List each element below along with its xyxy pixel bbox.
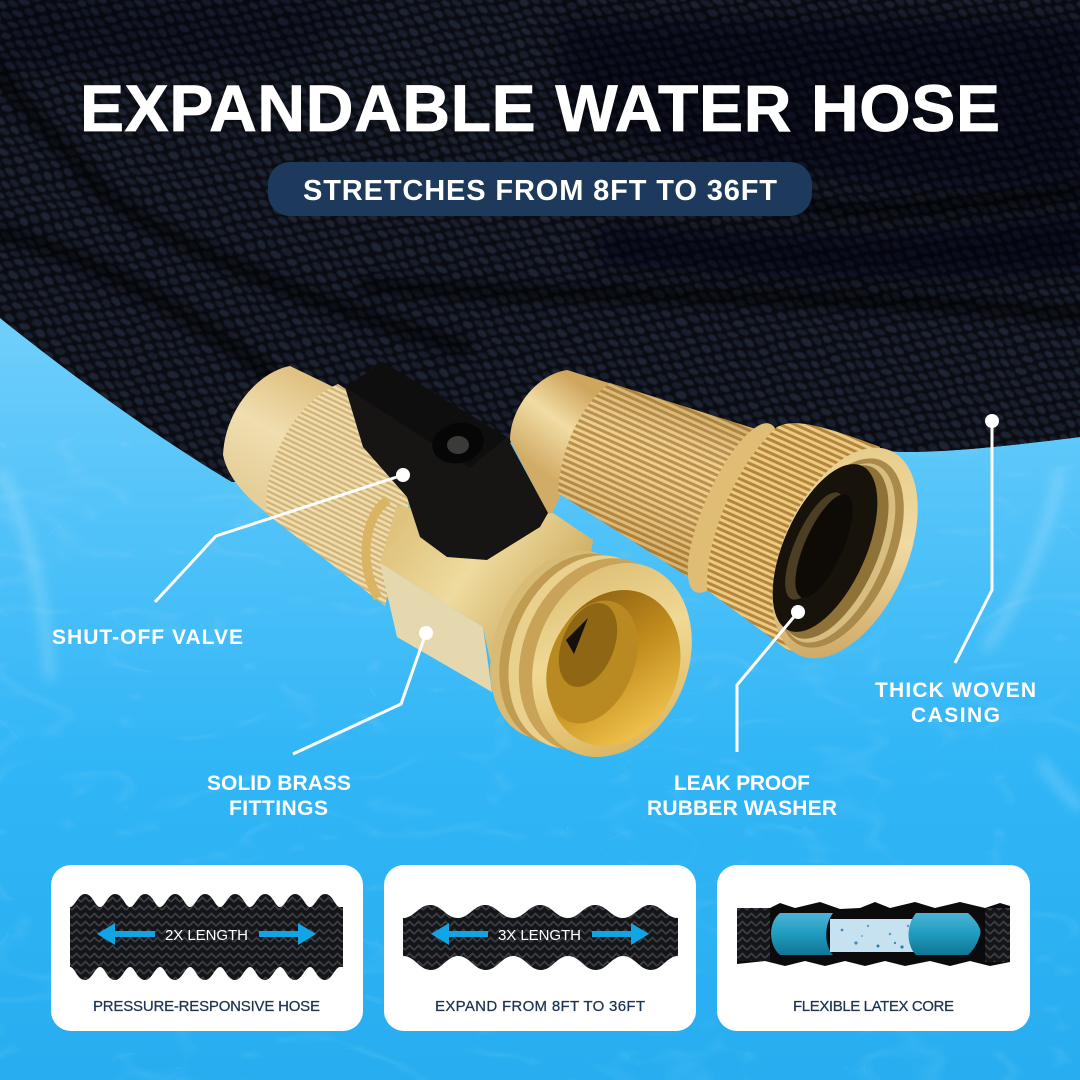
- latex core: clear centre: [830, 919, 918, 952]
- subtitle pill: STRETCHES FROM 8FT TO 36FT: [303, 175, 777, 207]
- ring: [366, 500, 388, 598]
- callout: leak proof rubber washer: RUBBER WASHER: [647, 797, 837, 820]
- latex core: left cap: [771, 913, 833, 955]
- caption: EXPAND FROM 8FT TO 36FT: [435, 998, 645, 1015]
- smooth collar: [510, 370, 612, 518]
- arrow: left: [431, 923, 488, 945]
- band ring: [670, 413, 796, 603]
- label: 3x length: 3X LENGTH: [498, 927, 581, 944]
- knurled collar: [707, 423, 880, 652]
- weave highlights: [737, 908, 1010, 962]
- caption: FLEXIBLE LATEX CORE: [793, 998, 954, 1015]
- arrow: right: [259, 923, 316, 945]
- callout: shut-off valve: [52, 468, 410, 649]
- hose sample: 3x length: [403, 905, 678, 970]
- callout: leak proof rubber washer: [647, 605, 837, 820]
- photo: left valve brass connector: [223, 366, 720, 781]
- photo: coiled black woven hose: [0, 0, 1080, 520]
- arrow: left: [97, 923, 155, 945]
- hex screw: [428, 417, 488, 469]
- hose sample: 2x length: [70, 894, 343, 980]
- hose sample: cutaway: [737, 902, 1010, 966]
- smooth collar: [223, 366, 350, 514]
- lip: [504, 539, 720, 781]
- photo: black valve handle: [345, 362, 548, 560]
- knurled sleeve: [266, 384, 425, 606]
- face rim: [743, 425, 947, 681]
- photo: right female brass connector: [510, 370, 947, 681]
- male threads: [463, 529, 663, 761]
- arrow: right: [592, 923, 649, 945]
- neck and top hex facet: [380, 505, 593, 660]
- callout: thick woven casing: CASING: [911, 704, 1000, 727]
- bore with washer: [751, 449, 899, 647]
- title: EXPANDABLE WATER HOSE: [80, 71, 1000, 145]
- callout: thick woven casing: [875, 414, 1036, 727]
- callout: leak proof rubber washer: LEAK PROOF: [674, 772, 810, 795]
- panel: expand from 8ft to 36ft: [384, 865, 696, 1031]
- latex core: right cap: [908, 913, 980, 955]
- callout: shut-off valve: SHUT-OFF VALVE: [52, 626, 243, 649]
- label: 2x length: 2X LENGTH: [165, 927, 248, 944]
- callout: thick woven casing: THICK WOVEN: [875, 679, 1036, 702]
- callout: solid brass fittings: [207, 626, 433, 820]
- panel: flexible latex core: [717, 865, 1030, 1031]
- panel: pressure-responsive hose: [51, 865, 363, 1031]
- hex bottom facet: [380, 563, 492, 692]
- callout: solid brass fittings: SOLID BRASS: [207, 772, 351, 795]
- callout: solid brass fittings: FITTINGS: [229, 797, 328, 820]
- thread rings: [752, 440, 930, 666]
- caption: PRESSURE-RESPONSIVE HOSE: [93, 998, 320, 1015]
- knurled sleeve: [558, 383, 762, 588]
- subtitle pill: [268, 162, 812, 216]
- bore: [525, 570, 703, 766]
